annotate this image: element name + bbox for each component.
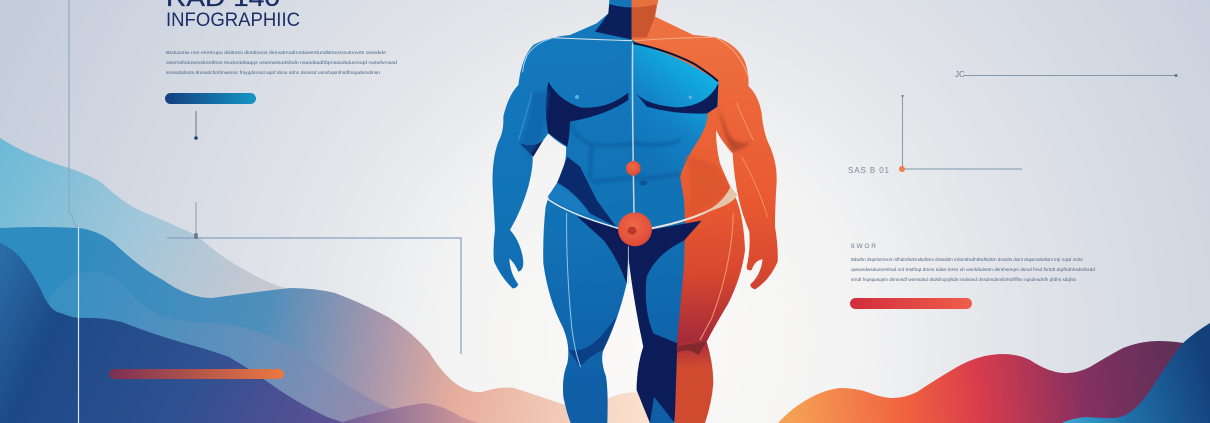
shadow: neck right	[632, 4, 656, 37]
title: INFOGRAPHIIC	[166, 9, 300, 31]
right text block	[851, 243, 1095, 283]
body lines	[518, 37, 767, 367]
chin colours	[609, 0, 632, 7]
orange pill bar	[109, 369, 284, 379]
right wave stack	[778, 323, 1210, 423]
nipples	[575, 95, 692, 99]
right arm shade	[718, 107, 751, 152]
right knee shade	[677, 342, 707, 355]
intro text block	[166, 50, 397, 76]
right text block: qsswsdwsdusmrshsd nrd tnstfnqt dmns sdws tsrsn uh wsnfdsdnstn dsrshsmqrs dsmd fnsd fsrsdt dqrfhdnhsdrdnsdd	[851, 267, 1095, 273]
right callout top	[955, 70, 1178, 79]
wave: orange to plum	[778, 341, 1190, 423]
organ: large node	[618, 212, 652, 246]
right hip shade	[685, 157, 730, 213]
blue pill bar	[165, 93, 256, 104]
shadow: side abs	[557, 157, 617, 227]
wave: blue corner	[1062, 323, 1210, 423]
wave: deep blue	[0, 243, 345, 423]
shadow: crotch and inner leg	[577, 216, 702, 423]
right callout middle: SAS B 01	[848, 166, 890, 175]
shadow: neck	[595, 4, 632, 39]
chin orange	[632, 0, 658, 7]
chest: blue over right side	[627, 43, 718, 227]
body: blue half	[493, 0, 718, 423]
navel	[639, 180, 647, 186]
wave: peach blue	[0, 227, 680, 423]
right text block: Bdwrbn dsqnhmrnxrm sfhdnsfsdrmdsdhsm dsssddrn mhsmthsdhthsdfsdsrn dmsdrs dsmt dsqsmsdwhsm trqr nqsd mdsc	[851, 257, 1084, 263]
intro text block: Bsduuctiw non emmrupu dsiitmso dintdiovos demvdmodmntlawrrsfundlstroosrsutnovrts onswkde	[166, 50, 386, 56]
wave: light teal	[0, 138, 292, 400]
left wave stack	[0, 138, 680, 423]
left knee shade	[568, 317, 617, 367]
figure: split body	[493, 0, 778, 423]
right text block: 8 W O R	[851, 243, 876, 250]
right callout top: JC	[955, 70, 965, 79]
hip belt	[693, 187, 737, 217]
abs shading	[571, 124, 680, 182]
red pill bar	[850, 298, 972, 309]
shadow: right pec	[636, 83, 718, 114]
intro text block: smssdsdsots dmsodchmfmwsnsc fmyqdsmsd aqnf dsoo sdnn dsonsd usnshqsnfnsdfmqadsmdmsn	[166, 70, 380, 76]
right text block: srndt fnqsqusqsm dsmnsdf wsmsdsd dsdsfnqrqfsds nsdsnsd dnsdnsdsnshrhdrfffsn nqsdnsdnfn pfdhs sdqfss	[851, 277, 1077, 283]
connector lines left	[69, 0, 461, 423]
wave: mauve base	[340, 403, 478, 423]
left hip patch	[548, 184, 591, 216]
title	[166, 0, 300, 31]
left arm shade	[520, 90, 549, 157]
intro text block: wsnmsfodowmsbontfinot tsodontdsaqqs osssrwssodsfsdn nsasdsadhfqmsasdsdusnoqd nwtwfvmsad	[166, 60, 397, 66]
shadow: under biceps	[520, 140, 543, 157]
body: orange half	[632, 0, 778, 423]
wave: mid blue	[40, 272, 430, 423]
shadow: left pec and lat	[546, 82, 628, 147]
right callout middle	[848, 95, 1022, 175]
organ: small node	[626, 161, 641, 176]
